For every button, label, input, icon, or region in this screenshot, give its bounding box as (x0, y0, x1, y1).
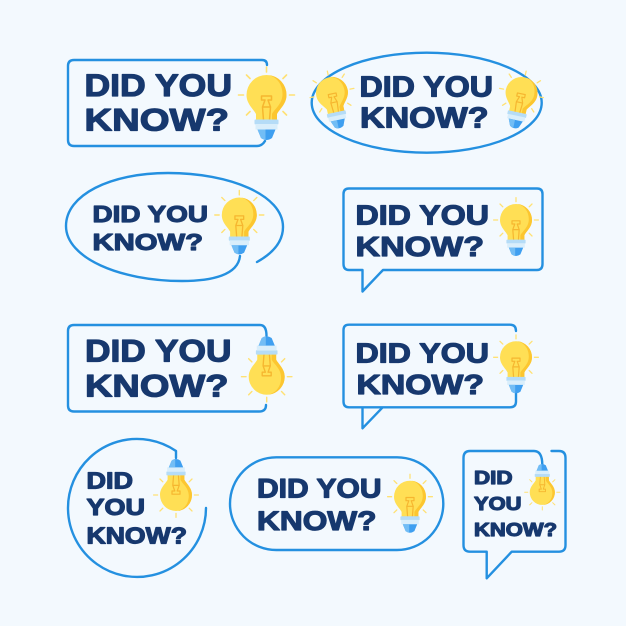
frame (68, 325, 266, 412)
icon: light bulb (238, 67, 294, 140)
heading: KNOW? (86, 522, 187, 548)
heading (85, 332, 232, 404)
icon: hanging light bulb (525, 464, 560, 510)
heading: KNOW? (356, 231, 484, 262)
heading: KNOW? (474, 519, 557, 540)
panel: rectangle badge with bulb (68, 60, 294, 146)
heading (474, 467, 557, 540)
heading: KNOW? (360, 102, 488, 134)
icon: left light bulb (305, 66, 361, 133)
panel: pill badge (230, 457, 443, 550)
frame (344, 325, 516, 428)
heading (360, 72, 493, 134)
heading (84, 67, 232, 138)
panel: speech bubble with inner bulb (344, 188, 542, 292)
heading: DID YOU (360, 72, 493, 104)
frame (66, 173, 283, 281)
heading: KNOW? (92, 229, 203, 255)
frame (344, 188, 542, 292)
frame (68, 60, 267, 146)
heading: DID YOU (84, 67, 232, 103)
heading: YOU (86, 494, 145, 520)
heading: DID (474, 467, 512, 488)
frame (464, 451, 566, 578)
icon: light bulb (494, 335, 538, 393)
heading (356, 200, 489, 262)
heading: DID YOU (257, 473, 382, 503)
heading (92, 201, 208, 255)
heading: DID YOU (85, 332, 232, 368)
heading: DID (86, 467, 133, 493)
heading: KNOW? (84, 102, 229, 138)
frame (68, 439, 206, 577)
heading: DID YOU (356, 338, 489, 368)
heading (257, 473, 382, 536)
heading: DID YOU (356, 200, 489, 230)
panel: tall speech bubble (464, 451, 566, 578)
heading: YOU (474, 493, 522, 514)
panel: oval badge with two bulbs (305, 53, 548, 153)
icon: light bulb (494, 198, 538, 256)
frame (230, 457, 443, 550)
icon: light bulb (388, 474, 432, 533)
heading (86, 467, 187, 548)
panel: speech bubble with bulb on edge (344, 325, 538, 428)
heading (356, 338, 489, 400)
icon: light bulb (215, 190, 264, 254)
icon: right light bulb (492, 66, 548, 133)
icon: hanging light bulb (242, 336, 292, 402)
frame (312, 53, 542, 153)
heading: KNOW? (85, 368, 228, 404)
panel: open oval badge (66, 173, 283, 281)
heading: KNOW? (356, 369, 484, 400)
heading: KNOW? (257, 506, 376, 536)
panel: circular badge (68, 439, 206, 577)
icon: hanging light bulb (154, 459, 198, 517)
heading: DID YOU (92, 201, 208, 227)
panel: rectangle badge with hanging bulb (68, 325, 292, 412)
